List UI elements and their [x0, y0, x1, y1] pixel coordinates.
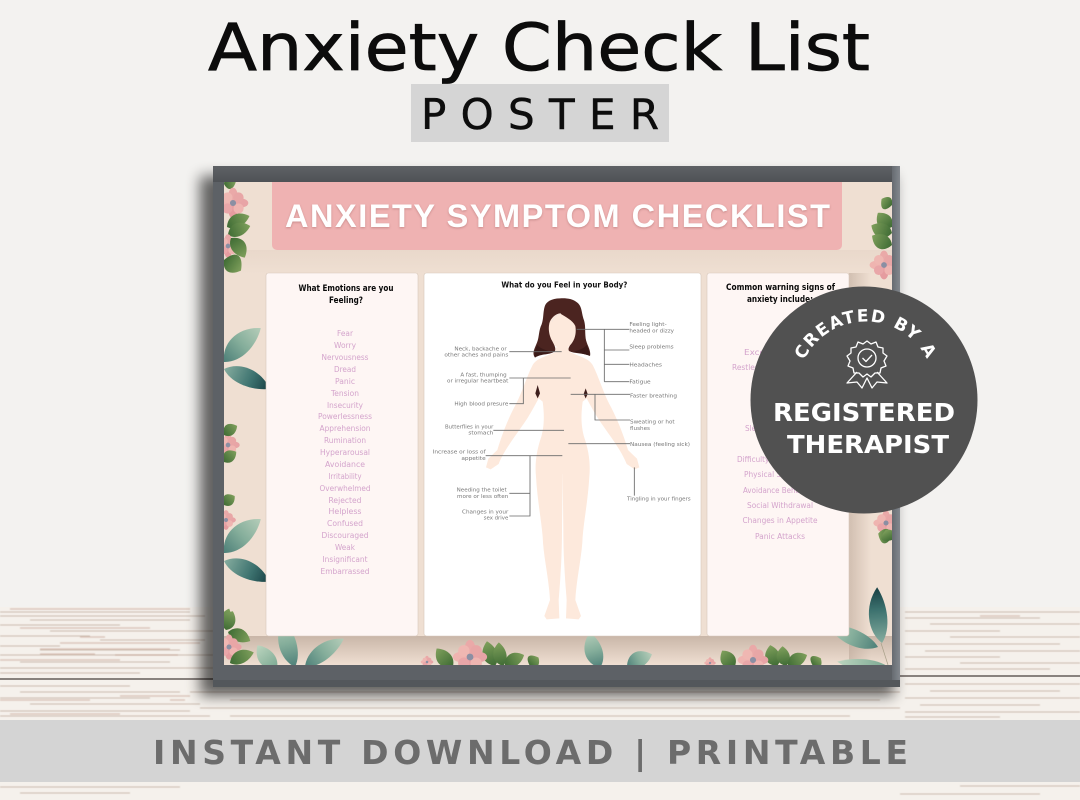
- warning signs heading: [726, 283, 835, 305]
- plank gaps: [0, 676, 1080, 679]
- emotions list: Insignificant: [322, 555, 368, 564]
- symptom labels right: Feeling light-: [629, 322, 667, 328]
- warning signs list: Avoidance Behaviors: [743, 486, 817, 495]
- emotions list: Worry: [334, 341, 357, 350]
- right mid flower cluster: [874, 511, 892, 544]
- armpit shadows: [535, 385, 540, 398]
- symptom labels left: stomach: [468, 431, 494, 437]
- symptom labels right: Sleep problems: [629, 345, 674, 351]
- left large leaves lower: [224, 519, 266, 582]
- symptom labels right: Nausea (feeling sick): [630, 442, 690, 448]
- emotions list: Weak: [335, 543, 356, 552]
- emotions list: Dread: [334, 365, 356, 374]
- emotions list: Overwhelmed: [320, 484, 371, 493]
- warning signs list: Excessive Worry: [744, 348, 817, 357]
- emotions list: Irritability: [328, 472, 362, 481]
- wooden table surface: [0, 607, 1080, 800]
- emotions list: Fear: [337, 329, 354, 338]
- symptom labels right: [626, 322, 691, 503]
- symptom labels left: Changes in your: [462, 509, 509, 515]
- warning signs list: [732, 348, 829, 541]
- emotions list: Insecurity: [327, 401, 364, 410]
- symptom labels left: more or less often: [457, 494, 509, 500]
- emotions list: Powerlessness: [318, 412, 372, 421]
- emotions list: [318, 329, 372, 576]
- symptom labels left: Needing the toilet: [457, 488, 507, 494]
- emotions heading: What Emotions are you: [298, 284, 394, 294]
- warning signs list: Social Withdrawal: [747, 501, 813, 510]
- bottom left flower cluster: [224, 608, 254, 665]
- symptom labels right: headed or dizzy: [629, 329, 675, 335]
- symptom labels left: or irregular heartbeat: [447, 379, 509, 385]
- poster background: [224, 182, 892, 665]
- badge arc text: CREATED BY A: [796, 309, 936, 359]
- top right flower cluster: [870, 197, 892, 280]
- symptom labels left: A fast, thumping: [460, 373, 507, 379]
- emotions list: Nervousness: [322, 353, 369, 362]
- header banner: [272, 182, 842, 250]
- symptom labels left: sex drive: [484, 516, 509, 522]
- left large leaves upper: [224, 328, 266, 390]
- symptom labels right: Sweating or hot: [630, 420, 675, 426]
- badge main text: THERAPIST: [787, 430, 949, 459]
- body figure: [486, 298, 639, 619]
- emotions list: Helpless: [328, 507, 362, 516]
- emotions list: Discouraged: [322, 531, 369, 540]
- panel: warning signs: [707, 273, 849, 636]
- symptom labels left: High blood presure: [454, 401, 509, 407]
- symptom labels left: Butterflies in your: [445, 424, 494, 430]
- icon: award rosette: [847, 341, 887, 388]
- symptom labels right: Faster breathing: [630, 393, 677, 399]
- panel: body: [424, 273, 701, 636]
- emotions list: Confused: [327, 519, 363, 528]
- warning signs list: Physical Symptoms: [744, 470, 816, 479]
- symptom labels left: other aches and pains: [444, 353, 508, 359]
- symptom labels left: appetite: [461, 456, 486, 462]
- badge main text: REGISTERED: [773, 398, 955, 427]
- emotions list: Avoidance: [325, 460, 365, 469]
- symptom labels right: flushes: [630, 426, 650, 432]
- symptom labels left: Increase or loss of: [433, 450, 487, 456]
- warning signs list: Panic Attacks: [755, 532, 805, 541]
- title: Anxiety Check List: [208, 11, 870, 86]
- emotions list: Rumination: [324, 436, 366, 445]
- emotions heading: [298, 284, 394, 306]
- warning signs list: Difficulty Concentrating: [737, 455, 823, 464]
- frame shadow: [200, 176, 894, 696]
- header text: ANXIETY SYMPTOM CHECKLIST: [285, 198, 830, 234]
- floral decorations: [216, 173, 899, 675]
- emotions list: Rejected: [328, 496, 362, 505]
- poster frame: [213, 166, 900, 687]
- footer text: INSTANT DOWNLOAD | PRINTABLE: [153, 733, 908, 772]
- panel: emotions: [266, 273, 418, 636]
- warning signs list: Restlessness or Irritability: [732, 363, 829, 372]
- subtitle: poster: POSTER: [421, 90, 659, 139]
- poster shading: [224, 250, 892, 665]
- left mid flowers: [224, 424, 240, 530]
- symptom labels left: [433, 346, 509, 522]
- warning signs list: Changes in Appetite: [742, 516, 818, 525]
- head: [546, 311, 578, 348]
- footer band: [0, 720, 1080, 782]
- emotions list: Hyperarousal: [320, 448, 370, 457]
- bottom left teal leaves: [256, 636, 344, 665]
- badge: registered therapist: [750, 286, 978, 514]
- body heading: What do you Feel in your Body?: [501, 280, 628, 289]
- emotions list: Panic: [335, 377, 355, 386]
- warning signs heading: Common warning signs of: [726, 283, 835, 293]
- symptom labels right: Tingling in your fingers: [626, 497, 691, 503]
- bottom right flower: [704, 644, 822, 665]
- symptom labels right: Fatigue: [629, 380, 651, 386]
- symptom labels left: Neck, backache or: [454, 346, 507, 352]
- badge main text: [773, 398, 955, 459]
- bottom right teal leaves: [837, 587, 888, 665]
- bottom centre flower: [420, 640, 540, 665]
- symptom labels right: Headaches: [629, 362, 662, 368]
- emotions list: Tension: [330, 389, 359, 398]
- emotions heading: Feeling?: [329, 296, 363, 306]
- warning signs list: Sleep Disturbances: [745, 424, 815, 433]
- warning signs heading: anxiety include:: [747, 295, 813, 305]
- emotions list: Apprehension: [320, 424, 371, 433]
- emotions list: Embarrassed: [320, 567, 370, 576]
- hair: [533, 298, 590, 358]
- bottom middle teal leaves: [584, 636, 652, 665]
- leader lines: [486, 329, 634, 516]
- top left flower cluster: [224, 182, 250, 273]
